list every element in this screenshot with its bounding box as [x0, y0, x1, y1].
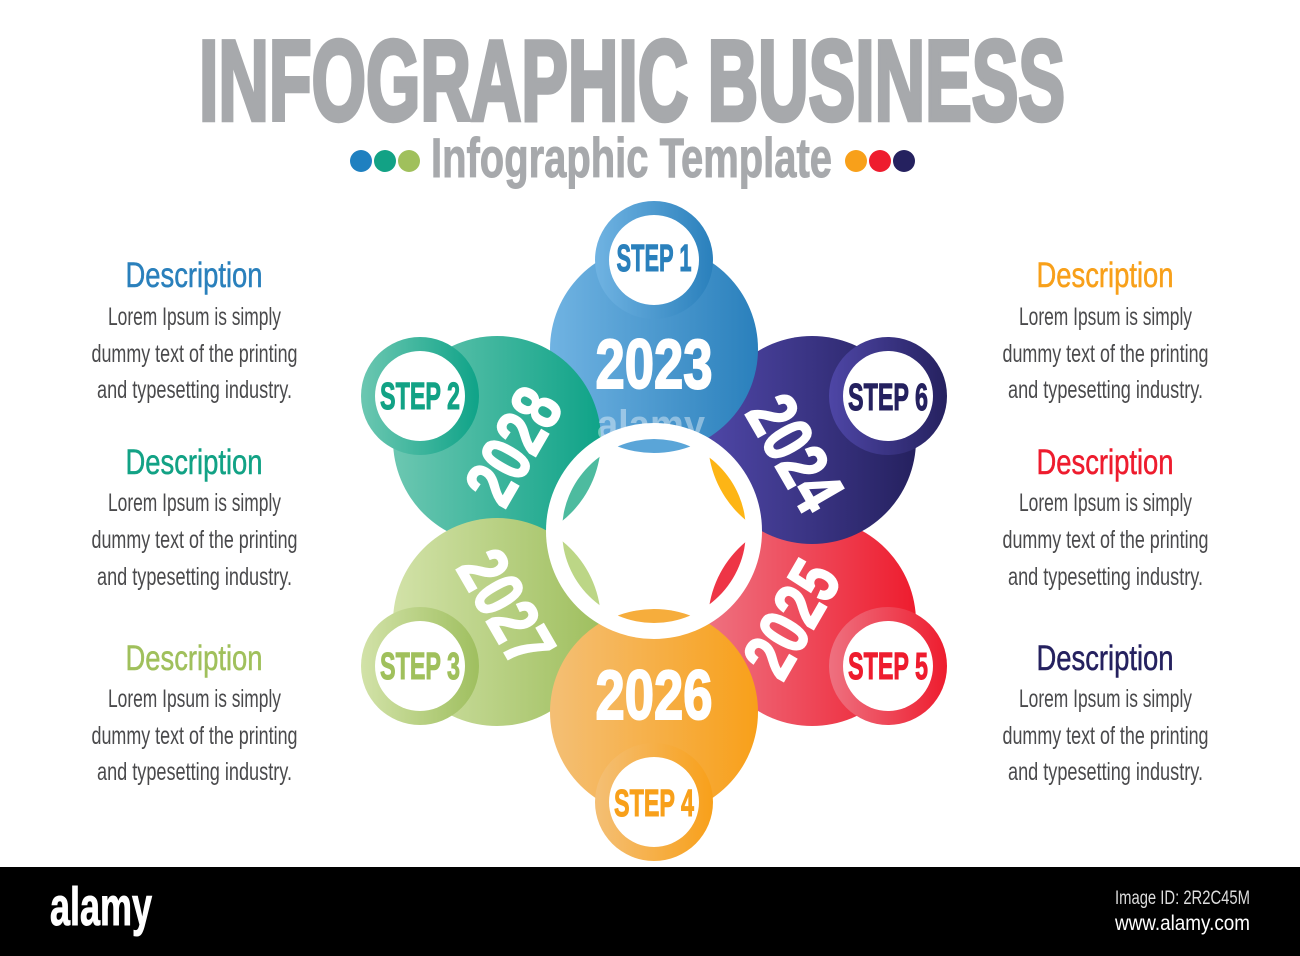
- petal: 2023 blue: [550, 245, 758, 453]
- badge: step 1: [595, 201, 713, 319]
- description: orange: Lorem Ipsum is simply: [1019, 303, 1192, 331]
- description: light green: [92, 639, 298, 786]
- description: green: and typesetting industry.: [97, 563, 292, 591]
- description: red: [1002, 443, 1208, 591]
- description: red: Description: [1036, 443, 1174, 482]
- subtitle row: [350, 126, 915, 189]
- description: orange: [1002, 256, 1208, 404]
- petal: 2025 red: [708, 518, 916, 726]
- badge: step 2: [361, 337, 479, 455]
- badge: step 2: STEP 2: [380, 376, 460, 418]
- center hub ring: [546, 423, 762, 639]
- petal: 2026 orange: [550, 608, 758, 816]
- description: navy: dummy text of the printing: [1002, 722, 1208, 750]
- year 2027: 2027: [442, 537, 570, 679]
- year 2026: 2026: [596, 656, 712, 734]
- description: green: dummy text of the printing: [92, 526, 298, 554]
- dots: right: [845, 150, 915, 172]
- badge: step 5: [829, 607, 947, 725]
- description: blue: Lorem Ipsum is simply: [108, 303, 281, 331]
- badge: step 4: [595, 743, 713, 861]
- description: blue: [92, 256, 298, 404]
- petal diagram: [361, 201, 947, 861]
- description: blue: dummy text of the printing: [92, 340, 298, 368]
- badge: step 1: STEP 1: [616, 238, 692, 280]
- description: blue: Description: [126, 256, 262, 295]
- subtitle: Infographic Template: [431, 126, 832, 189]
- image id: Image ID: 2R2C45M: [1115, 888, 1250, 909]
- description: light green: dummy text of the printing: [92, 722, 298, 750]
- badge: step 3: STEP 3: [380, 646, 460, 688]
- description: light green: Description: [126, 639, 262, 678]
- badge: step 3: [361, 607, 479, 725]
- description: light green: and typesetting industry.: [97, 758, 292, 786]
- description: red: and typesetting industry.: [1008, 563, 1203, 591]
- badge: step 6: STEP 6: [848, 377, 928, 419]
- year 2023: 2023: [596, 325, 712, 403]
- badge: step 5: STEP 5: [848, 646, 928, 688]
- petal: 2027 light green: [393, 518, 601, 726]
- badge: step 6: [829, 337, 947, 455]
- description: green: Description: [126, 443, 262, 482]
- watermark ghost: alamy: [597, 403, 706, 447]
- petal: 2028 green: [393, 336, 601, 544]
- description: light green: Lorem Ipsum is simply: [108, 685, 281, 713]
- dots: left: [350, 150, 420, 172]
- footer bar: [0, 867, 1300, 956]
- description: navy: and typesetting industry.: [1008, 758, 1203, 786]
- year 2024: 2024: [731, 382, 859, 524]
- description: navy: Lorem Ipsum is simply: [1019, 685, 1192, 713]
- description: green: Lorem Ipsum is simply: [108, 489, 281, 517]
- description: orange: Description: [1036, 256, 1174, 295]
- website: www.alamy.com: [1114, 912, 1250, 935]
- description: orange: dummy text of the printing: [1002, 340, 1208, 368]
- year 2028: 2028: [450, 375, 578, 517]
- description: red: dummy text of the printing: [1002, 526, 1208, 554]
- year 2025: 2025: [728, 548, 856, 690]
- petal: 2024 navy: [708, 336, 916, 544]
- footer logo: alamy: [50, 877, 152, 937]
- description: blue: and typesetting industry.: [97, 376, 292, 404]
- hub lens slivers: [562, 439, 746, 623]
- description: navy: [1002, 639, 1208, 786]
- description: orange: and typesetting industry.: [1008, 376, 1203, 404]
- description: navy: Description: [1036, 639, 1174, 678]
- description: green: [92, 443, 298, 591]
- badge: step 4: STEP 4: [614, 783, 694, 825]
- description: red: Lorem Ipsum is simply: [1019, 489, 1192, 517]
